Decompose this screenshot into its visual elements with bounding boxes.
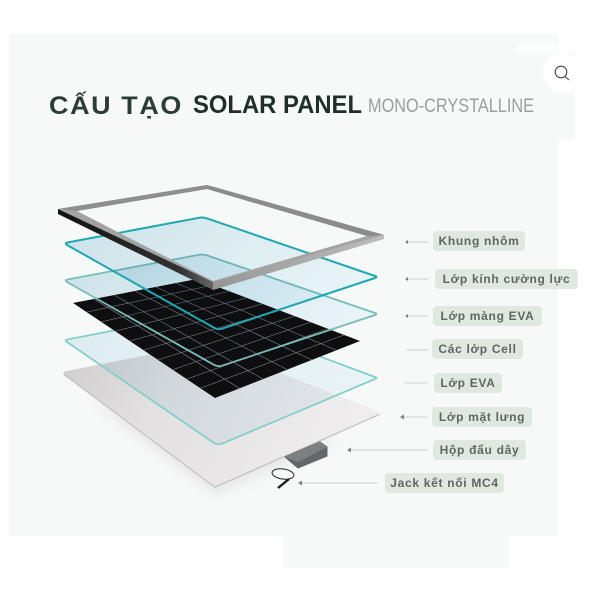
- icon: junction box: [285, 442, 327, 468]
- label: Khung nhôm: Khung nhôm: [438, 234, 519, 248]
- arrows: [298, 240, 428, 486]
- title: CẤU TẠO: [49, 91, 183, 120]
- label: Lớp màng EVA: [433, 306, 542, 326]
- label: Jack kết nối MC4: [385, 473, 504, 493]
- title: SOLAR PANEL: [193, 91, 362, 119]
- label: Lớp EVA: Lớp EVA: [440, 376, 496, 390]
- back sheet layer: [65, 345, 378, 495]
- label: Lớp mặt lưng: Lớp mặt lưng: [439, 410, 525, 424]
- EVA film layer: [66, 255, 376, 366]
- label: Lớp màng EVA: Lớp màng EVA: [440, 309, 535, 323]
- icon: search button: [543, 53, 583, 93]
- title: MONO-CRYSTALLINE: [368, 96, 534, 117]
- aluminium frame: [58, 185, 384, 290]
- solar cell layer: [73, 279, 360, 398]
- label: Các lớp Cell: [432, 339, 523, 359]
- label: Hộp đấu dây: Hộp đấu dây: [440, 443, 519, 457]
- label: Jack kết nối MC4: Jack kết nối MC4: [390, 476, 499, 490]
- EVA glass layer: [66, 314, 376, 444]
- label: Hộp đấu dây: [433, 440, 526, 460]
- label: Lớp EVA: [434, 373, 502, 393]
- label: Các lớp Cell: Các lớp Cell: [438, 342, 517, 356]
- label: Lớp kính cường lực: Lớp kính cường lực: [443, 272, 570, 286]
- label: Khung nhôm: [433, 231, 525, 251]
- icon: MC4 cable: [271, 468, 295, 488]
- title: [49, 91, 534, 120]
- tempered glass layer: [66, 218, 376, 329]
- label: Lớp kính cường lực: [435, 269, 578, 289]
- label: Lớp mặt lưng: [432, 407, 532, 427]
